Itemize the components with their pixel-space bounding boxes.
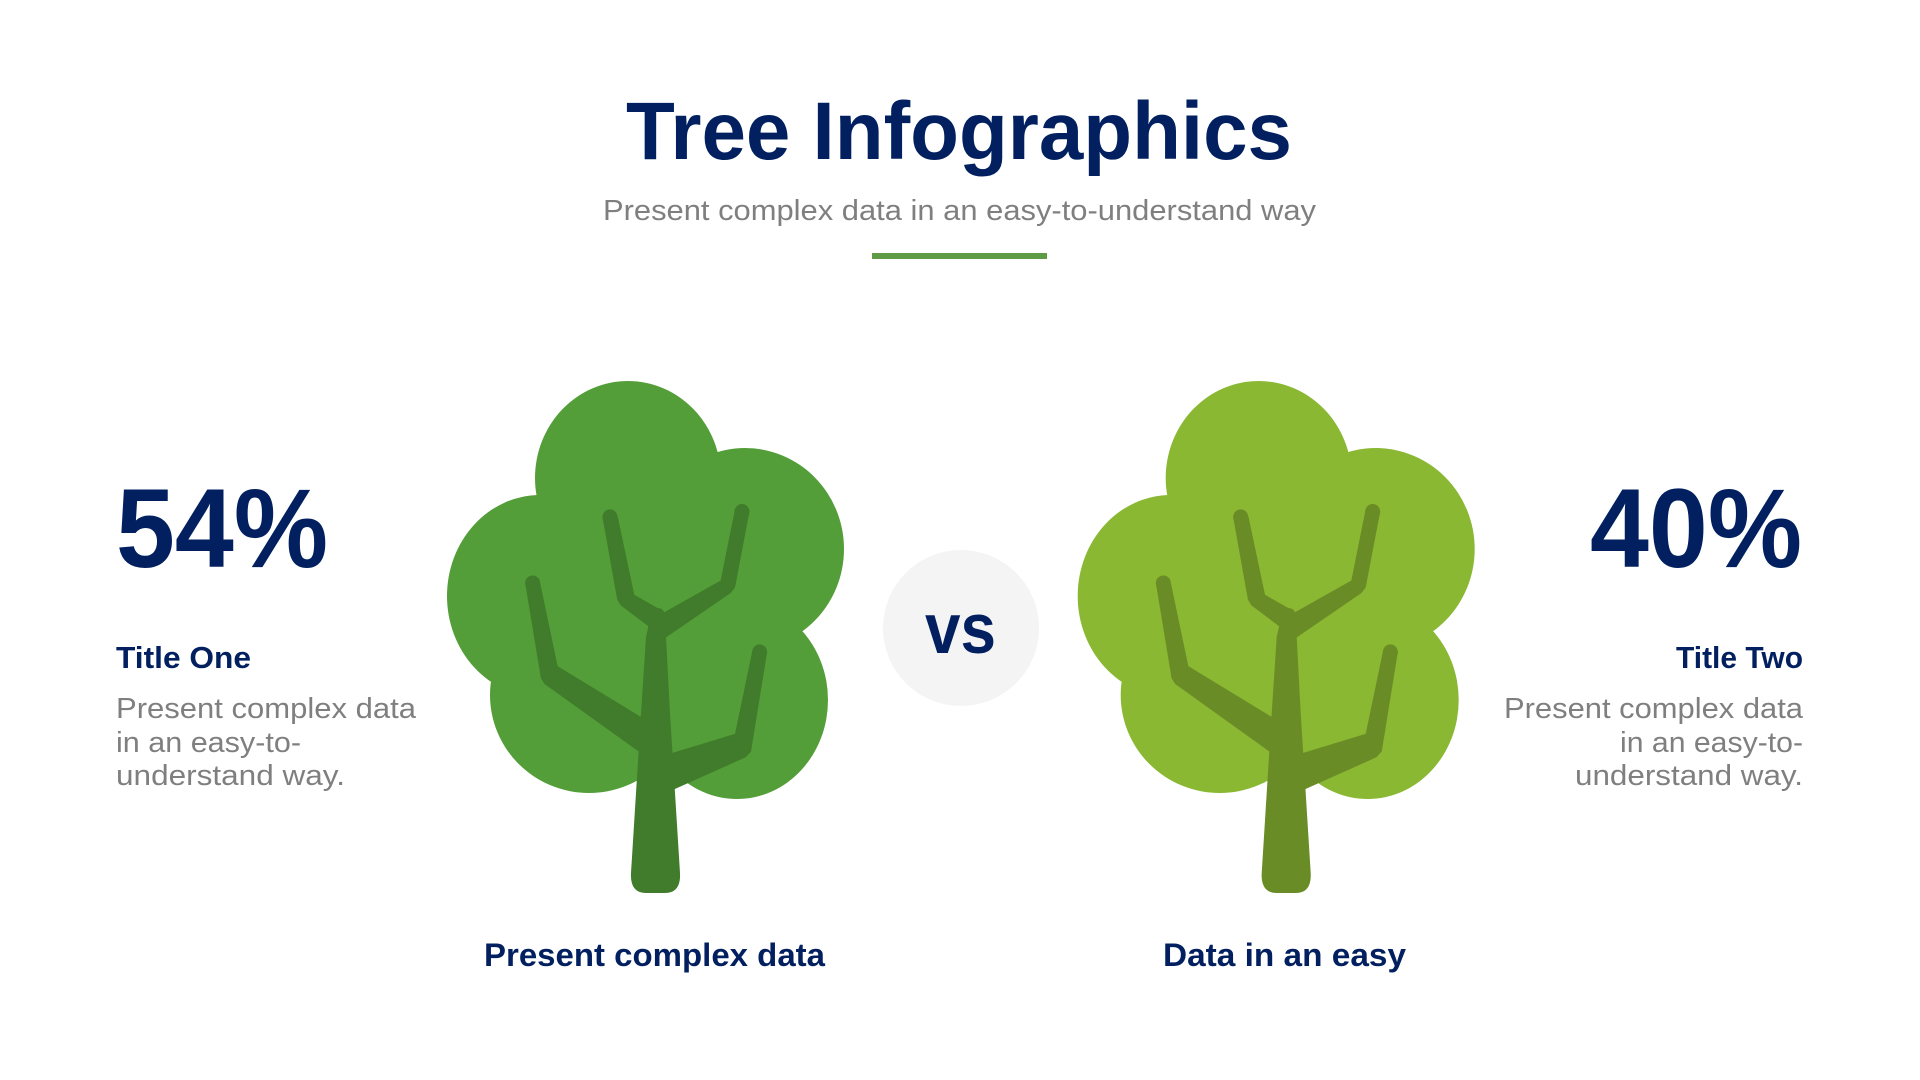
right description: in an easy-to- bbox=[1620, 727, 1803, 759]
panel: right statistic bbox=[1504, 466, 1804, 792]
tree trunk bbox=[1262, 608, 1311, 893]
right heading: Title Two bbox=[1676, 640, 1803, 675]
left description bbox=[116, 693, 417, 792]
right percentage: 40% bbox=[1590, 466, 1802, 591]
tree branches bbox=[526, 505, 766, 788]
right tree caption: Data in an easy bbox=[1163, 937, 1406, 973]
tree canopy bbox=[447, 381, 844, 799]
right description: understand way. bbox=[1575, 760, 1803, 792]
right description: Present complex data bbox=[1504, 693, 1804, 725]
left description: Present complex data bbox=[116, 693, 417, 725]
left description: understand way. bbox=[116, 760, 345, 792]
tree trunk bbox=[631, 608, 680, 893]
title underline bbox=[872, 253, 1047, 259]
icon: dark green tree bbox=[447, 381, 844, 893]
left heading: Title One bbox=[116, 640, 251, 675]
title: Tree Infographics bbox=[626, 86, 1292, 177]
vs circle bbox=[883, 550, 1039, 706]
left description: in an easy-to- bbox=[116, 727, 301, 759]
subtitle: Present complex data in an easy-to-understand way bbox=[603, 195, 1317, 227]
vs label: vs bbox=[925, 590, 996, 669]
vs badge bbox=[883, 550, 1039, 706]
left percentage: 54% bbox=[116, 466, 328, 591]
panel: left statistic bbox=[116, 466, 417, 792]
icon: light green tree bbox=[1078, 381, 1475, 893]
left tree caption: Present complex data bbox=[484, 937, 825, 973]
right description bbox=[1504, 693, 1804, 792]
tree canopy bbox=[1078, 381, 1475, 799]
tree branches bbox=[1157, 505, 1397, 788]
